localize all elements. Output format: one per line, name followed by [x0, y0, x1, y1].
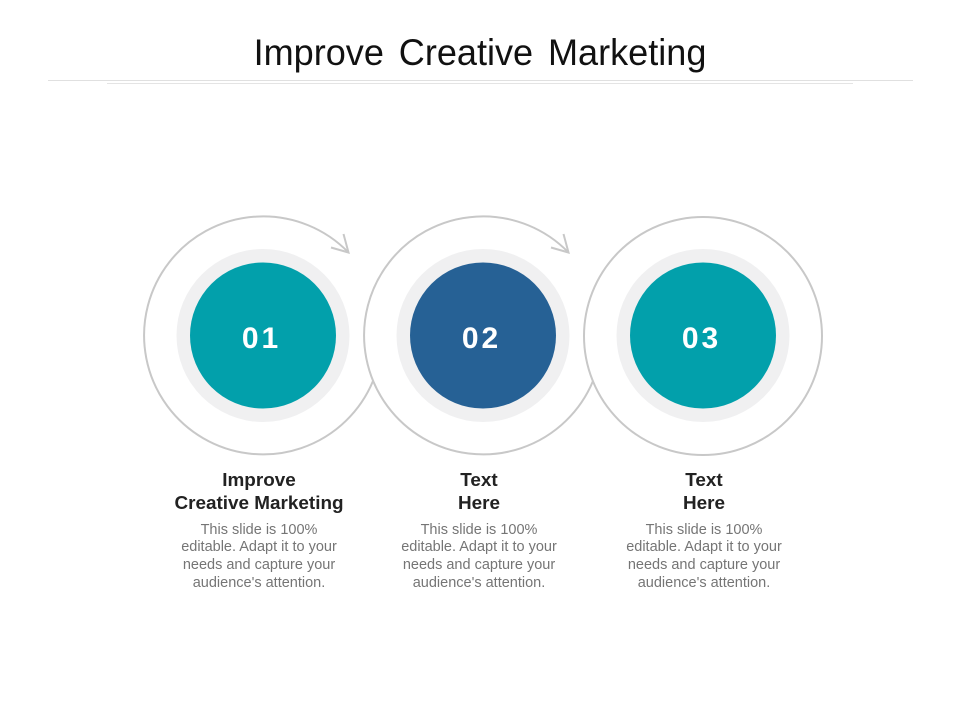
- step 3 description: audience's attention.: [638, 575, 770, 591]
- arrow ring 1: [144, 216, 373, 454]
- step 1 description: editable. Adapt it to your: [181, 539, 337, 555]
- halo ring 2: [396, 249, 570, 422]
- step 1 heading: Creative Marketing: [174, 493, 344, 513]
- step 3 description: editable. Adapt it to your: [626, 539, 782, 555]
- number disc 1: [190, 262, 336, 408]
- step 3 description: [626, 522, 782, 591]
- number 02: 02: [462, 322, 501, 355]
- step 2 description: This slide is 100%: [421, 522, 537, 538]
- step 3 description: needs and capture your: [628, 557, 780, 573]
- number 01: 01: [242, 322, 281, 355]
- step 3 heading: [683, 470, 725, 513]
- step 2 heading: [457, 470, 500, 513]
- step 2 description: editable. Adapt it to your: [401, 539, 557, 555]
- step 1 heading: Improve: [222, 470, 296, 490]
- step 2 description: needs and capture your: [403, 557, 555, 573]
- number disc 3: [630, 262, 776, 408]
- halo ring 3: [616, 249, 790, 422]
- step 2 description: [401, 522, 557, 591]
- step 1 heading: [174, 470, 344, 513]
- title: Improve Creative Marketing: [253, 32, 706, 73]
- step 2 heading: Text: [460, 470, 497, 490]
- step 3 circle graphic: [584, 217, 822, 455]
- step 3 heading: Here: [683, 493, 725, 513]
- step 1 description: This slide is 100%: [201, 522, 317, 538]
- number 03: 03: [682, 322, 721, 355]
- step 3 description: This slide is 100%: [646, 522, 762, 538]
- number disc 2: [410, 262, 556, 408]
- step 2 circle graphic: [364, 216, 593, 454]
- halo ring 1: [176, 249, 350, 422]
- step 2 description: audience's attention.: [413, 575, 545, 591]
- step 2 heading: Here: [457, 493, 500, 513]
- step 3 heading: Text: [685, 470, 723, 490]
- arrow ring 2: [364, 216, 593, 454]
- outer ring 3: [584, 217, 822, 455]
- step 1 circle graphic: [144, 216, 373, 454]
- step 1 description: [181, 522, 337, 591]
- step 1 description: needs and capture your: [183, 557, 335, 573]
- step 1 description: audience's attention.: [193, 575, 325, 591]
